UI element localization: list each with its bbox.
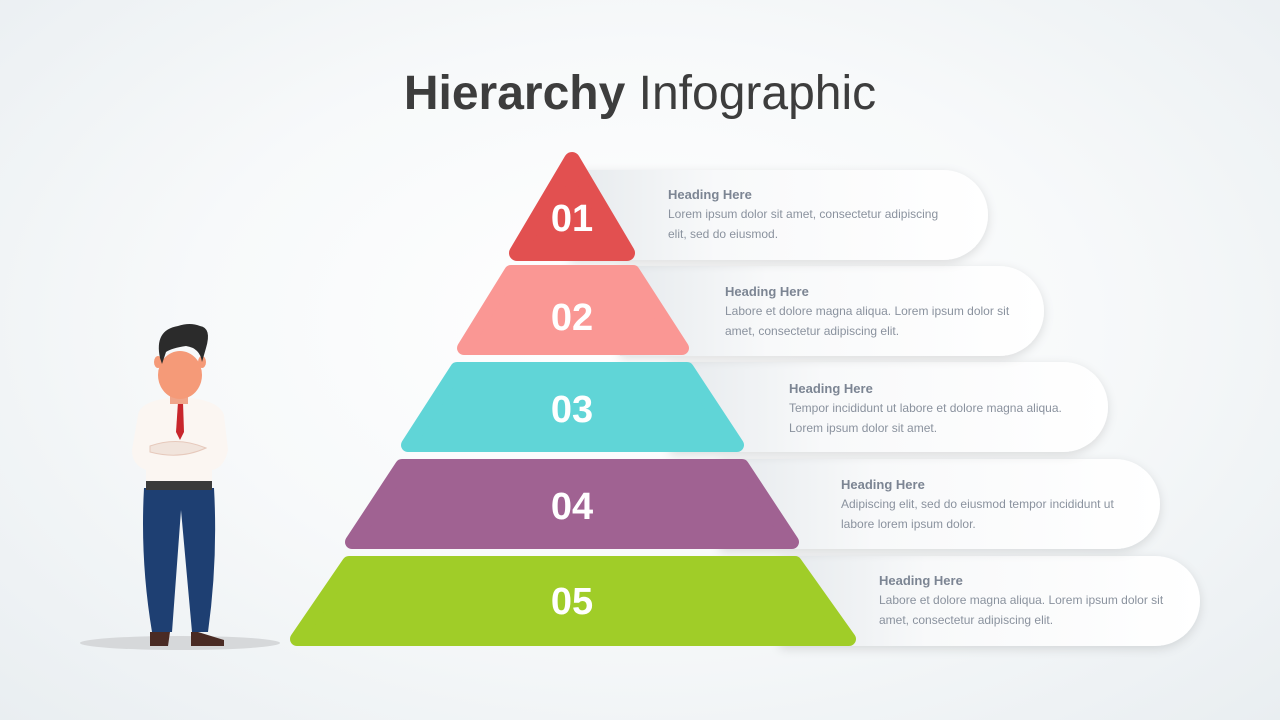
pill: 01 bbox=[570, 170, 988, 260]
pill: 04: Adipiscing elit, sed do eiusmod tempor incididunt ut bbox=[841, 497, 1114, 511]
title: Hierarchy Infographic bbox=[404, 67, 876, 120]
tier 04 bbox=[352, 466, 792, 542]
pill: 03: Lorem ipsum dolor sit amet. bbox=[789, 421, 937, 435]
pill: 05 bbox=[780, 556, 1200, 646]
pill: 01: Heading Here bbox=[668, 187, 752, 202]
pill: 02: Heading Here bbox=[725, 284, 809, 299]
tier 02 bbox=[464, 272, 682, 348]
pill: 01: elit, sed do eiusmod. bbox=[668, 227, 778, 241]
pill: 02: Labore et dolore magna aliqua. Lorem ipsum dolor sit bbox=[725, 304, 1010, 318]
pill: 01: Lorem ipsum dolor sit amet, consectetur adipiscing bbox=[668, 207, 938, 221]
pill: 05: amet, consectetur adipiscing elit. bbox=[879, 613, 1053, 627]
tier 02: 02 bbox=[551, 297, 593, 339]
pill: 05: Heading Here bbox=[879, 573, 963, 588]
pill: 04: labore lorem ipsum dolor. bbox=[841, 517, 976, 531]
pill: 03: Heading Here bbox=[789, 381, 873, 396]
pill: 03 bbox=[670, 362, 1108, 452]
tier 04: 04 bbox=[551, 486, 593, 528]
pill: 05: Labore et dolore magna aliqua. Lorem ipsum dolor sit bbox=[879, 593, 1164, 607]
pill: 02 bbox=[620, 266, 1044, 356]
tier 05 bbox=[297, 563, 849, 639]
pill: 03: Tempor incididunt ut labore et dolore magna aliqua. bbox=[789, 401, 1062, 415]
pill: 02: amet, consectetur adipiscing elit. bbox=[725, 324, 899, 338]
tier 05: 05 bbox=[551, 581, 593, 623]
tier 03 bbox=[408, 369, 737, 445]
tier 01: 01 bbox=[551, 198, 593, 240]
pill: 04: Heading Here bbox=[841, 477, 925, 492]
tier 01 bbox=[517, 160, 627, 253]
tier 03: 03 bbox=[551, 389, 593, 431]
pill: 04 bbox=[720, 459, 1160, 549]
character: businessman bbox=[80, 324, 280, 650]
